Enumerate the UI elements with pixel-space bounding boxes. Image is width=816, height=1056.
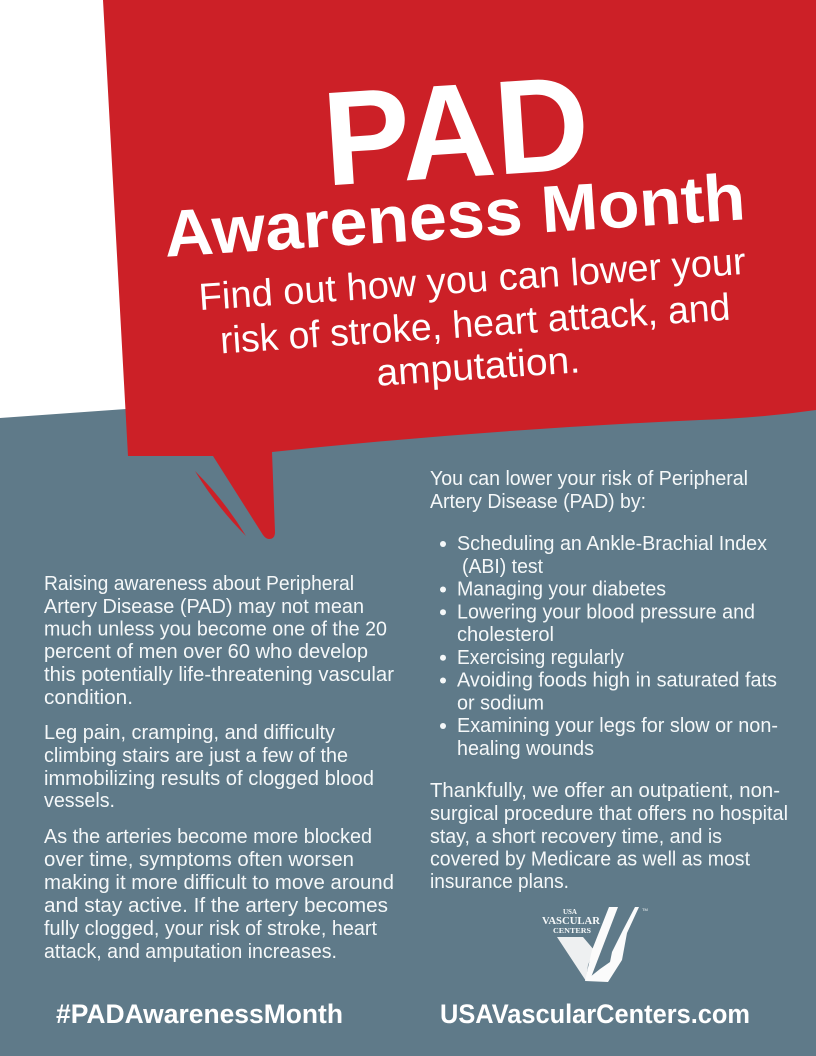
- bullet list: Avoiding foods high in saturated fats: [457, 670, 777, 692]
- text block: progression: As the arteries become more blocked: [44, 826, 372, 848]
- subtitle: risk of stroke, heart attack, and: [219, 287, 732, 362]
- title: PAD: [319, 49, 594, 215]
- subtitle: Find out how you can lower your: [197, 241, 747, 319]
- text block: outpatient procedure: Thankfully, we offer an outpatient, non-: [430, 780, 780, 802]
- text block: progression: [44, 826, 394, 963]
- bullet list: Examining your legs for slow or non-: [457, 715, 778, 737]
- bullet list: Managing your diabetes: [457, 578, 666, 600]
- text block: symptoms: climbing stairs are just a few of the: [44, 745, 348, 767]
- logo: USA Vascular Centers: CENTERS: [553, 926, 591, 935]
- logo: USA Vascular Centers: TM: [642, 907, 648, 912]
- bullet list: Exercising regularly: [457, 647, 624, 669]
- title: [162, 49, 747, 271]
- text block: symptoms: [44, 722, 374, 812]
- text block: progression: making it more difficult to move around: [44, 872, 394, 894]
- title: Awareness Month: [162, 159, 747, 271]
- text block: lower your risk intro: You can lower your risk of Peripheral: [430, 468, 748, 490]
- bullet list: (ABI) test: [462, 556, 543, 578]
- text block: lower your risk intro: Artery Disease (PAD) by:: [430, 491, 646, 513]
- bullet list: Lowering your blood pressure and: [457, 601, 755, 623]
- text block: awareness intro: Raising awareness about Peripheral: [44, 573, 354, 595]
- text block: awareness intro: percent of men over 60 who develop: [44, 641, 368, 663]
- hashtag: #PADAwarenessMonth: [56, 999, 343, 1029]
- text block: outpatient procedure: covered by Medicare as well as most: [430, 848, 750, 870]
- bullet list: cholesterol: [457, 624, 554, 646]
- text block: outpatient procedure: [430, 780, 788, 893]
- text block: outpatient procedure: surgical procedure that offers no hospital: [430, 803, 788, 825]
- text block: progression: attack, and amputation increases.: [44, 941, 337, 963]
- bullet list: or sodium: [457, 692, 544, 714]
- text block: awareness intro: [44, 573, 394, 709]
- text block: progression: over time, symptoms often worsen: [44, 849, 354, 871]
- bullet list: healing wounds: [457, 738, 594, 760]
- text block: symptoms: Leg pain, cramping, and difficulty: [44, 722, 335, 744]
- bullet list: [440, 533, 778, 760]
- logo: USA Vascular Centers: USA: [563, 908, 577, 916]
- speech bubble: [103, 0, 816, 539]
- text block: symptoms: vessels.: [44, 790, 115, 812]
- text block: awareness intro: Artery Disease (PAD) may not mean: [44, 596, 364, 618]
- subtitle: amputation.: [375, 339, 581, 395]
- bullet list: Scheduling an Ankle-Brachial Index: [457, 533, 767, 555]
- text block: awareness intro: this potentially life-threatening vascular: [44, 664, 394, 686]
- background panel: [0, 360, 816, 1056]
- website: USAVascularCenters.com: [440, 999, 750, 1029]
- text block: awareness intro: much unless you become one of the 20: [44, 618, 387, 640]
- logo: USA Vascular Centers: VASCULAR: [542, 916, 601, 927]
- text block: progression: and stay active. If the artery becomes: [44, 895, 388, 917]
- text block: awareness intro: condition.: [44, 687, 133, 709]
- text block: symptoms: immobilizing results of clogged blood: [44, 768, 374, 790]
- text block: outpatient procedure: insurance plans.: [430, 871, 569, 893]
- text block: progression: fully clogged, your risk of stroke, heart: [44, 918, 377, 940]
- subtitle: [197, 241, 747, 395]
- text block: outpatient procedure: stay, a short recovery time, and is: [430, 826, 722, 848]
- text block: lower your risk intro: [430, 468, 748, 513]
- logo: USA Vascular Centers: [542, 907, 648, 982]
